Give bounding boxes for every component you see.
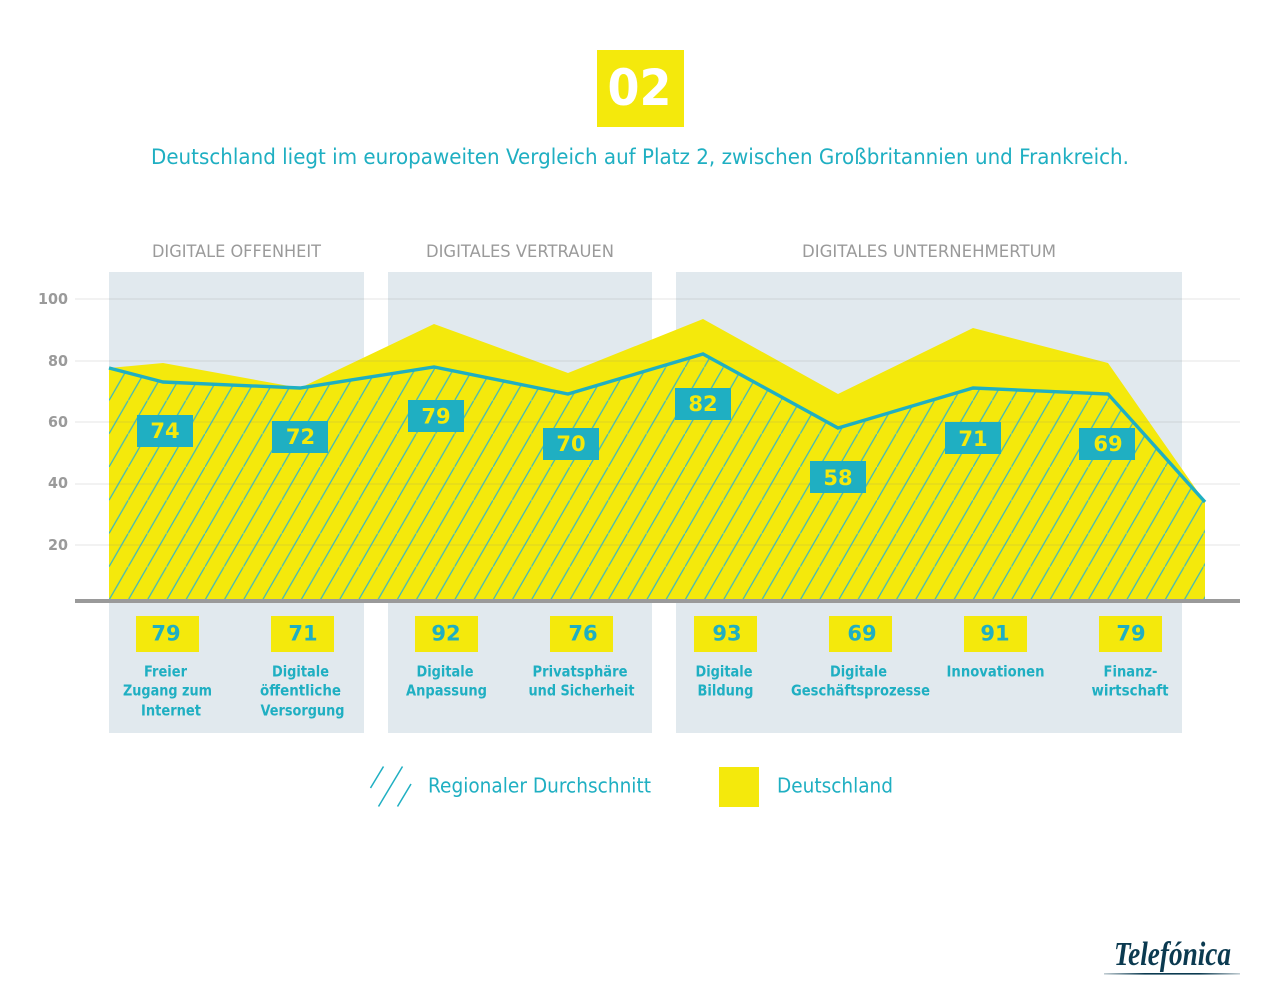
- badge: 02: [597, 50, 684, 127]
- category labels: Versorgung: [260, 702, 344, 720]
- y axis grid and labels: [38, 290, 1240, 554]
- y axis grid and labels: 100: [38, 290, 68, 308]
- panel: digitales vertrauen: [388, 242, 652, 733]
- heading: digitales unternehmertum: DIGITALES UNTERNEHMERTUM: [802, 242, 1056, 261]
- panel: digitale offenheit: [109, 242, 364, 733]
- category labels: und Sicherheit: [528, 682, 634, 700]
- heading: digitales vertrauen: DIGITALES VERTRAUEN: [426, 242, 614, 261]
- Deutschland values: 79: [1116, 622, 1146, 646]
- logo: Telefonica: Telefónica: [1114, 936, 1231, 973]
- category labels: Anpassung: [406, 682, 487, 700]
- regional values: 58: [823, 466, 853, 490]
- x axis: [75, 599, 1240, 603]
- legend: regional average: [370, 766, 651, 806]
- panel: digitales unternehmertum: [676, 242, 1182, 733]
- category labels: Digitale: [272, 662, 329, 680]
- heading: digitale offenheit: DIGITALE OFFENHEIT: [152, 242, 322, 261]
- regional values: 69: [1093, 432, 1123, 456]
- Deutschland values: 91: [980, 622, 1010, 646]
- Deutschland values: 92: [431, 622, 461, 646]
- legend: Deutschland: [719, 767, 893, 807]
- regional values: 82: [688, 392, 718, 416]
- category labels: Privatsphäre: [532, 662, 628, 680]
- category labels: wirtschaft: [1092, 682, 1168, 700]
- y axis grid and labels: 20: [48, 536, 68, 554]
- category labels: Internet: [141, 702, 201, 720]
- badge: 02: 02: [608, 59, 672, 117]
- regional values: 72: [286, 425, 315, 449]
- area: regional average hatch: [109, 354, 1205, 600]
- regional values: 79: [421, 404, 451, 428]
- y axis grid and labels: 40: [48, 474, 68, 492]
- regional values: 70: [556, 432, 586, 456]
- category labels: Bildung: [698, 682, 754, 700]
- regional values: [137, 388, 1135, 493]
- Deutschland values: 69: [847, 622, 877, 646]
- legend: Deutschland: Deutschland: [777, 774, 893, 798]
- category labels: Innovationen: [946, 662, 1044, 680]
- y axis grid and labels: 60: [48, 413, 68, 431]
- category labels: Finanz-: [1104, 662, 1158, 680]
- legend: regional average: Regionaler Durchschnitt: [428, 774, 651, 798]
- category labels: Geschäftsprozesse: [791, 682, 930, 700]
- category labels: Freier: [144, 662, 188, 680]
- Deutschland values: 71: [288, 622, 318, 646]
- Deutschland values: 79: [151, 622, 181, 646]
- line: regional average: [109, 354, 1205, 502]
- title: Deutschland liegt im europaweiten Vergleich auf Platz 2, zwischen Großbritannien und Frankreich.: [151, 145, 1129, 169]
- category labels: [123, 662, 1168, 720]
- category labels: Zugang zum: [123, 682, 212, 700]
- category labels: Digitale: [696, 662, 752, 680]
- regional values: 74: [150, 419, 180, 443]
- regional values: 71: [958, 427, 988, 451]
- area: Deutschland: [109, 319, 1205, 600]
- category labels: Digitale: [416, 662, 474, 680]
- y axis grid and labels: 80: [48, 352, 68, 370]
- Deutschland values: 93: [712, 622, 742, 646]
- category labels: Digitale: [830, 662, 887, 680]
- category labels: öffentliche: [260, 682, 341, 700]
- Deutschland values: 76: [568, 622, 598, 646]
- Deutschland values: [136, 616, 1162, 652]
